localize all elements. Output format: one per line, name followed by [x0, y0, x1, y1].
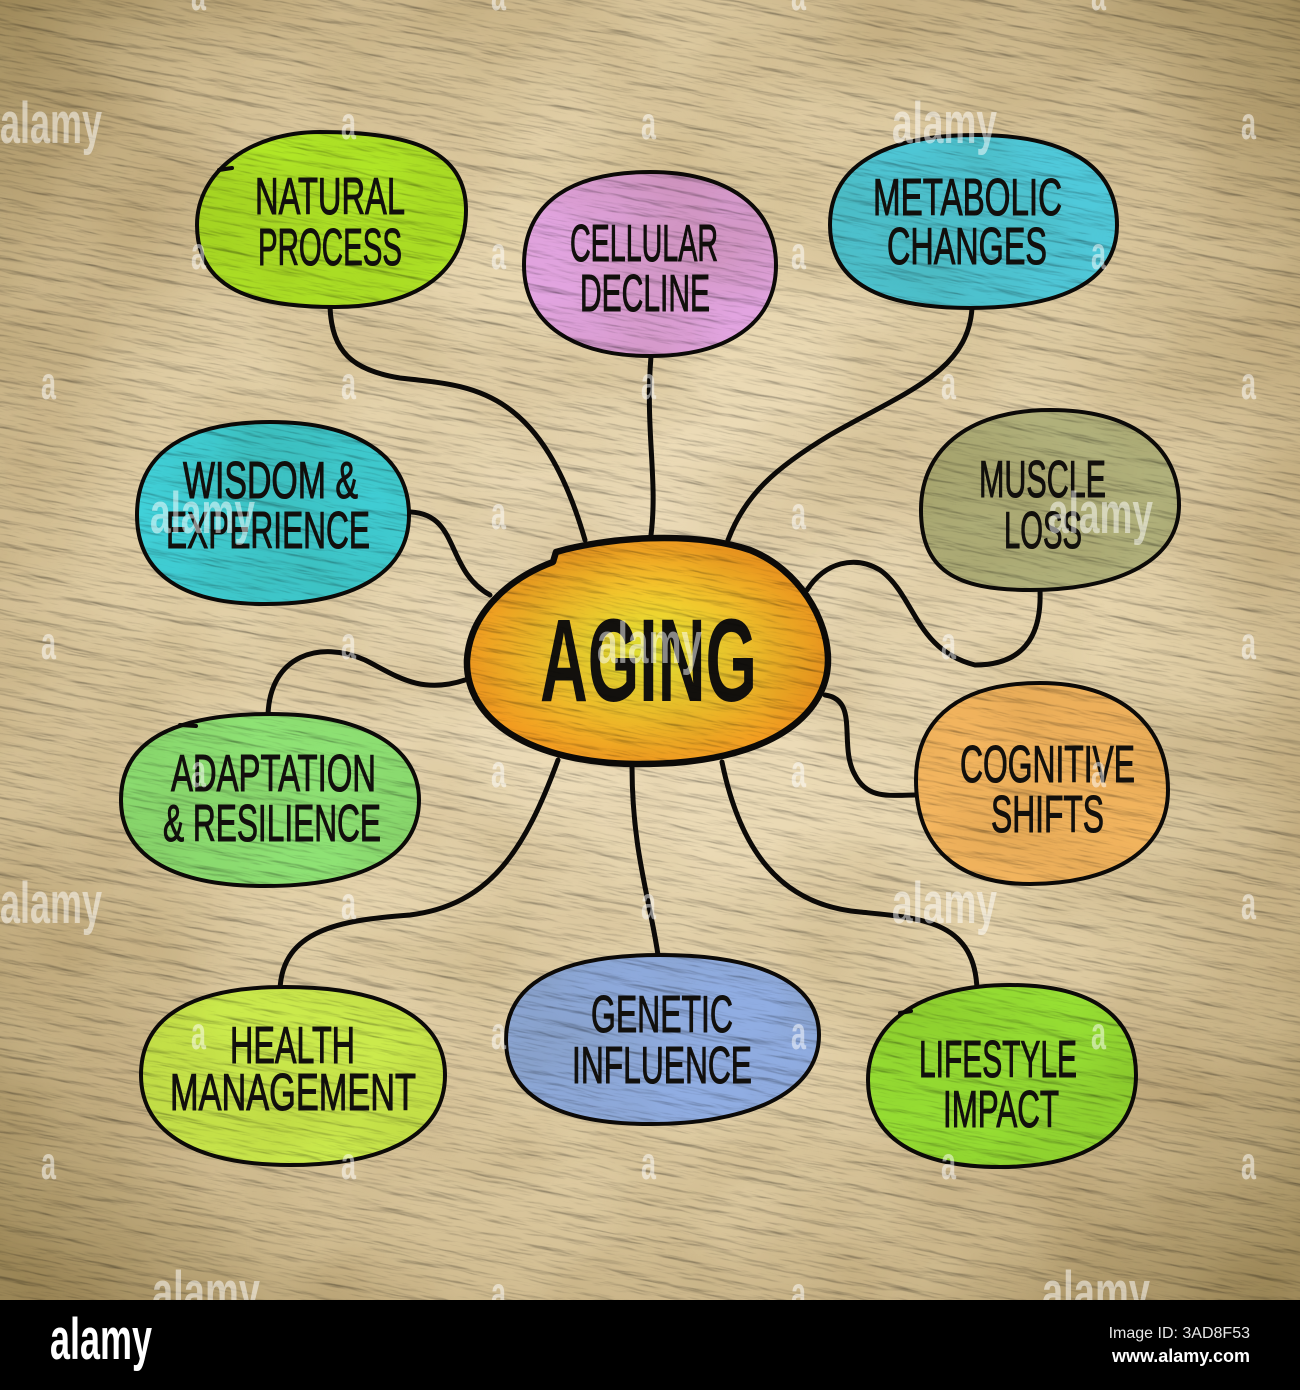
watermarks: a: [791, 487, 806, 539]
node: cellular decline: CELLULAR: [570, 215, 718, 273]
watermarks: a: [191, 1007, 206, 1059]
central node: aging: AGING: [540, 595, 757, 727]
node: wisdom and experience: WISDOM &: [183, 452, 358, 510]
watermarks: a: [341, 97, 356, 149]
node: adaptation and resilience: & RESILIENCE: [163, 795, 381, 853]
watermarks: a: [491, 227, 506, 279]
watermarks: a: [641, 1137, 656, 1189]
node: cognitive shifts: COGNITIVE: [960, 736, 1135, 794]
node: natural process: NATURAL: [255, 168, 405, 226]
node: health management: [141, 987, 445, 1165]
watermarks: a: [341, 1137, 356, 1189]
node: genetic influence: GENETIC: [591, 986, 733, 1044]
watermarks: a: [941, 357, 956, 409]
node: muscle loss: [921, 410, 1179, 590]
node: adaptation and resilience: ADAPTATION: [171, 745, 376, 803]
watermarks: a: [491, 745, 506, 797]
watermarks: a: [491, 1267, 506, 1319]
website: www.alamy.com: [1111, 1346, 1250, 1366]
node: genetic influence: INFLUENCE: [572, 1037, 752, 1095]
watermarks: a: [641, 97, 656, 149]
watermarks: a: [1091, 227, 1106, 279]
watermarks: a: [1091, 1007, 1106, 1059]
watermarks: alamy: [892, 871, 997, 936]
node: muscle loss: MUSCLE: [979, 451, 1106, 509]
central node: aging: [467, 538, 828, 764]
node: cognitive shifts: [916, 683, 1168, 884]
watermarks: alamy: [892, 91, 997, 156]
watermarks: a: [191, 745, 206, 797]
watermarks: a: [1091, 745, 1106, 797]
node: cellular decline: [524, 172, 776, 356]
node: lifestyle impact: LIFESTYLE: [919, 1031, 1077, 1089]
watermarks: a: [941, 617, 956, 669]
node: wisdom and experience: EXPERIENCE: [166, 502, 370, 560]
image id: Image ID: 3AD8F53: [1109, 1325, 1250, 1342]
node: metabolic changes: [830, 135, 1117, 308]
connector lines: [268, 307, 1040, 990]
node: metabolic changes: CHANGES: [887, 218, 1047, 276]
node: lifestyle impact: [868, 985, 1136, 1167]
watermarks: a: [41, 357, 56, 409]
watermarks: a: [941, 1137, 956, 1189]
watermarks: a: [341, 877, 356, 929]
node: muscle loss: LOSS: [1004, 502, 1082, 560]
node: cellular decline: DECLINE: [580, 265, 710, 323]
node: cognitive shifts: SHIFTS: [991, 786, 1104, 844]
footer logo: alamy: [50, 1307, 152, 1372]
watermarks: a: [341, 357, 356, 409]
node: natural process: PROCESS: [258, 219, 402, 277]
node: health management: HEALTH: [230, 1017, 355, 1075]
node: health management: MANAGEMENT: [170, 1064, 416, 1122]
node: lifestyle impact: IMPACT: [943, 1081, 1059, 1139]
watermarks: a: [191, 227, 206, 279]
watermarks: alamy: [0, 871, 102, 936]
watermarks: a: [491, 1007, 506, 1059]
footer bar: [0, 1300, 1300, 1390]
watermarks: alamy: [1042, 1260, 1150, 1325]
watermarks: alamy: [597, 611, 702, 676]
watermarks: alamy: [152, 1260, 260, 1325]
watermarks: a: [341, 617, 356, 669]
node: metabolic changes: METABOLIC: [873, 169, 1062, 227]
node: natural process: [197, 132, 466, 307]
node: genetic influence: [506, 955, 819, 1124]
watermarks: alamy: [1048, 481, 1153, 546]
watermarks: a: [641, 877, 656, 929]
watermarks: a: [791, 745, 806, 797]
watermarks: a: [41, 1137, 56, 1189]
watermarks: a: [791, 1007, 806, 1059]
watermarks: a: [791, 1267, 806, 1319]
watermarks: a: [41, 617, 56, 669]
node: wisdom and experience: [137, 422, 409, 604]
watermarks: a: [491, 487, 506, 539]
watermarks: alamy: [0, 91, 102, 156]
watermarks: a: [791, 227, 806, 279]
watermarks: alamy: [150, 481, 255, 546]
node: adaptation and resilience: [121, 714, 419, 886]
watermarks: a: [641, 357, 656, 409]
